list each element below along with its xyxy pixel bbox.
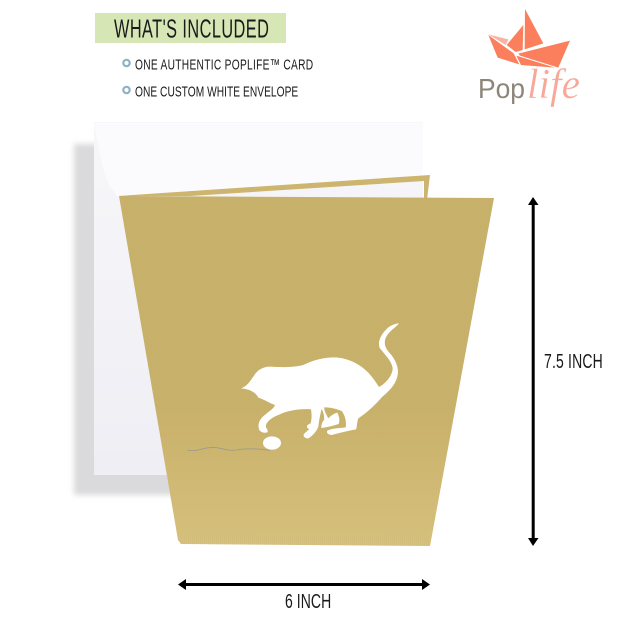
- envelope shadow: [74, 144, 344, 495]
- item: white envelope: ONE CUSTOM WHITE ENVELOPE: [135, 82, 298, 100]
- yarn string: [187, 447, 270, 451]
- logo: poplife: [478, 9, 580, 108]
- height arrow: [528, 197, 538, 546]
- cat silhouette with yarn: [187, 323, 399, 451]
- height label: 7.5 INCH: [544, 349, 603, 373]
- card back panel: [118, 175, 430, 200]
- list of included items: [123, 55, 313, 100]
- logo wordmark: life: life: [527, 62, 580, 108]
- heading: what's included: WHAT'S INCLUDED: [114, 15, 269, 43]
- cat: [241, 323, 399, 438]
- envelope flap: [94, 123, 423, 197]
- item: poplife card: ONE AUTHENTIC POPLIFE™ CARD: [135, 55, 313, 73]
- width label: 6 INCH: [285, 589, 331, 613]
- width arrow: [178, 579, 430, 590]
- logo wordmark: pop: Pop: [478, 73, 525, 104]
- card front: [119, 196, 494, 546]
- yarn ball: [263, 436, 281, 450]
- envelope: [94, 122, 423, 475]
- icon: origami boat: [488, 9, 570, 68]
